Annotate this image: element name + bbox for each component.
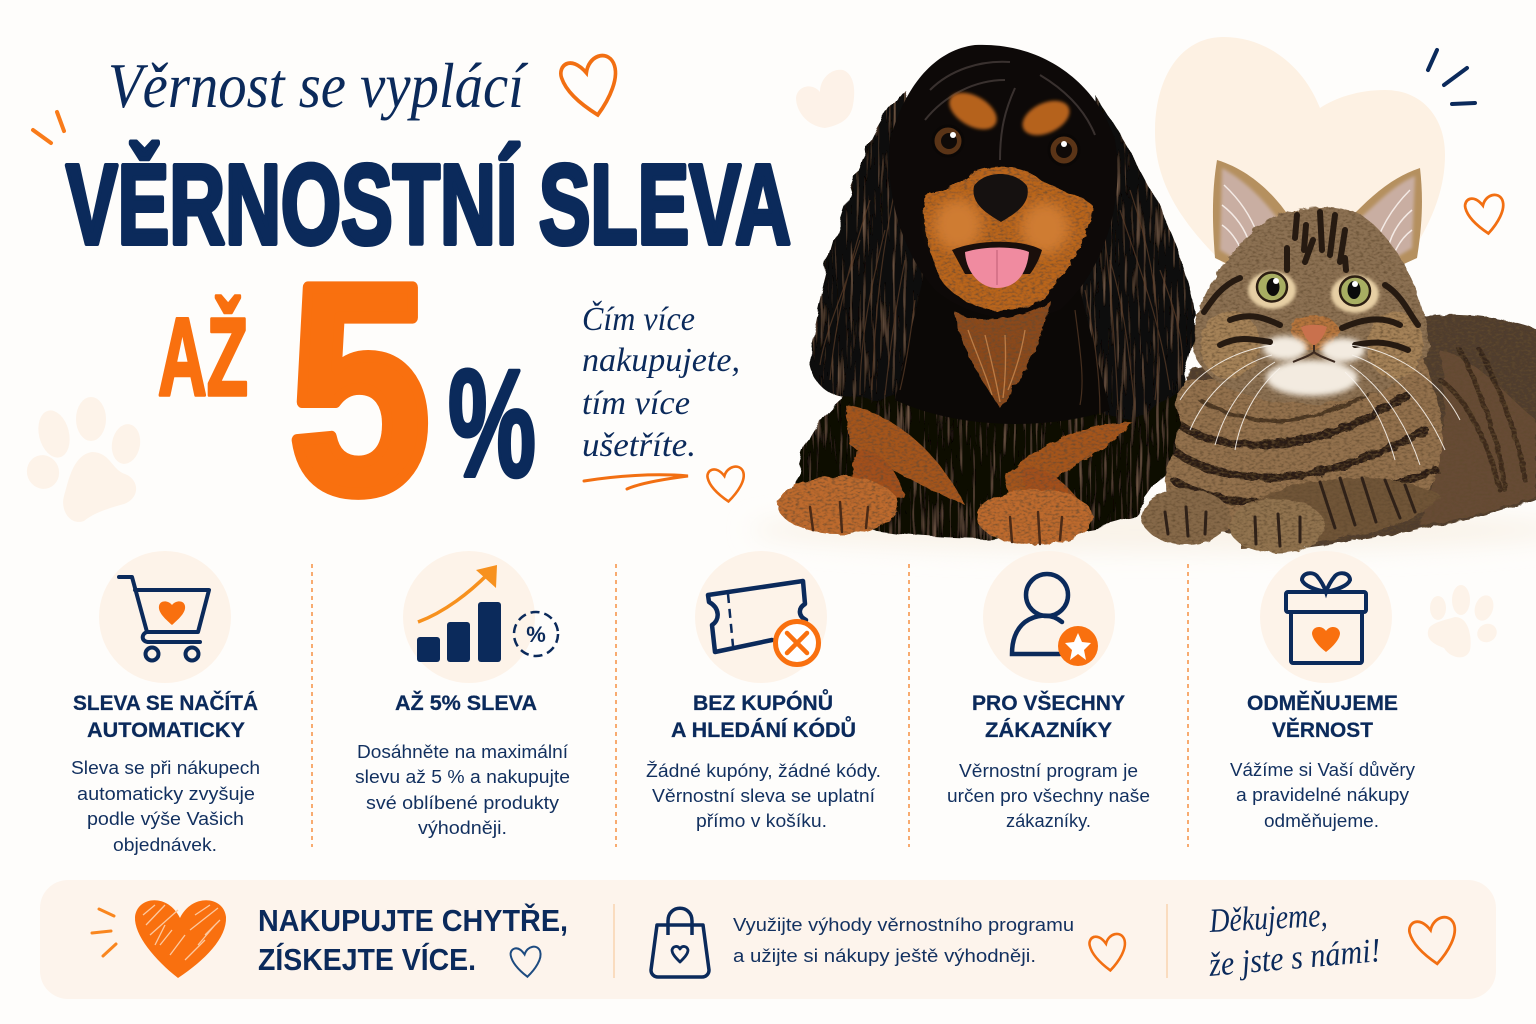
heading line 2: VĚRNOST — [1272, 718, 1373, 742]
thank you note: že jste s námi! — [1207, 932, 1382, 984]
paw print left — [22, 397, 143, 522]
hand-lettered side note — [582, 300, 740, 464]
cat nose — [1301, 325, 1327, 345]
body text — [355, 742, 570, 838]
dog eyebrows — [943, 85, 1075, 142]
dog eyes — [933, 126, 1079, 165]
banner headline: NAKUPUJTE CHYTŘE, — [258, 902, 568, 938]
dog head — [889, 45, 1118, 318]
icon: growth chart — [403, 551, 558, 683]
dog nose — [973, 174, 1028, 222]
dog neck — [895, 270, 1110, 424]
body text: slevu až 5 % a nakupujte — [355, 767, 570, 787]
body text: výhodněji. — [418, 818, 507, 838]
thank you note: Děkujeme, — [1208, 897, 1328, 940]
heading: ODMĚŇUJEME — [1247, 691, 1398, 715]
icon: shopping cart — [99, 551, 231, 683]
banner text — [733, 915, 1074, 966]
icon: growth chart: % — [526, 622, 546, 647]
heart outline — [1088, 932, 1129, 973]
dog forehead sheen — [925, 62, 1095, 160]
cat eyes — [1257, 272, 1370, 306]
divider — [613, 904, 615, 978]
heading line 2: AUTOMATICKY — [87, 719, 245, 742]
cat eye surrounds — [1248, 271, 1379, 313]
dog fringe strands — [968, 330, 1025, 402]
banner text: Využijte výhody věrnostního programu — [733, 915, 1074, 935]
feature 3: no coupons — [646, 551, 881, 831]
dog cheek highlights — [934, 199, 1069, 254]
dog mouth and tongue — [952, 242, 1042, 288]
banner headline line 2: ZÍSKEJTE VÍCE. — [258, 942, 476, 977]
scribbled orange heart — [135, 900, 226, 978]
blue heart outline — [510, 945, 544, 979]
icon: person with star — [983, 551, 1115, 683]
heart outline — [1408, 914, 1461, 968]
body text — [646, 761, 881, 831]
dog body — [796, 353, 1178, 538]
heading: PRO VŠECHNY — [972, 691, 1125, 715]
percent sign: % — [448, 338, 536, 509]
hand-lettered side note: ušetříte. — [582, 427, 696, 464]
heart outline right — [1464, 192, 1509, 237]
body text: podle výše Vašich — [87, 809, 244, 829]
main title: VĚRNOSTNÍ SLEVA — [66, 142, 791, 268]
bottom banner — [40, 880, 1496, 999]
body text: Vážíme si Vaší důvěry — [1230, 760, 1415, 780]
heading: AŽ 5% SLEVA — [395, 691, 537, 715]
orange rays — [92, 909, 116, 956]
decorative big heart behind pets — [1155, 37, 1445, 330]
cat ears — [1213, 160, 1290, 270]
feature 4: all customers — [947, 551, 1150, 831]
small heart note — [706, 464, 748, 504]
body text: určen pro všechny naše — [947, 786, 1150, 806]
cat head — [1192, 207, 1430, 404]
navy rays — [1428, 50, 1475, 104]
body text: své oblíbené produkty — [366, 793, 559, 813]
heading: SLEVA SE NAČÍTÁ — [73, 691, 258, 715]
dog ear strands — [820, 190, 1183, 415]
cat whiskers — [1180, 345, 1460, 465]
divider — [1166, 904, 1168, 978]
dog chest markings — [845, 405, 1132, 505]
hand-lettered side note: tím více — [582, 385, 690, 422]
dog chest fringe — [955, 300, 1050, 408]
heading line 2: A HLEDÁNÍ KÓDŮ — [671, 716, 856, 742]
swoosh underline — [584, 475, 688, 489]
dog paws — [778, 449, 1093, 545]
feature column dividers — [312, 564, 1188, 847]
label: AŽ: AŽ — [158, 296, 248, 419]
banner text: a užijte si nákupy ještě výhodněji. — [733, 946, 1036, 966]
hand-lettered side note: Čím více — [582, 300, 695, 338]
body text: objednávek. — [113, 835, 217, 855]
heart outline top — [558, 51, 626, 122]
body text — [947, 761, 1150, 831]
body text: odměňujeme. — [1264, 811, 1379, 831]
dog muzzle — [924, 167, 1092, 310]
paw print right — [1428, 585, 1500, 657]
body text: automaticky zvyšuje — [77, 784, 255, 804]
body text: a pravidelné nákupy — [1236, 785, 1409, 805]
thank you note — [1207, 897, 1382, 984]
heading: BEZ KUPÓNŮ — [693, 689, 833, 715]
icon: ticket with cross — [695, 551, 827, 683]
body text — [1230, 760, 1415, 831]
body text: zákazníky. — [1006, 811, 1091, 831]
dog ears — [809, 90, 1195, 420]
icon: gift box — [1260, 551, 1392, 683]
body text — [71, 758, 260, 855]
decorative small heart — [796, 70, 854, 128]
heading line 2: ZÁKAZNÍKY — [985, 719, 1112, 742]
icon: shopping bag — [651, 908, 709, 977]
body text: Dosáhněte na maximální — [357, 742, 568, 762]
hand-lettered side note: nakupujete, — [582, 342, 740, 379]
body text: přímo v košíku. — [696, 811, 827, 831]
body text: Věrnostní program je — [959, 761, 1138, 781]
big number 5: 5 — [289, 223, 430, 554]
banner background — [40, 880, 1496, 999]
feature 5: rewarding loyalty — [1230, 551, 1415, 831]
cat body — [1142, 314, 1536, 553]
cat markings — [1204, 212, 1418, 350]
feature 2: up to 5% — [355, 551, 570, 838]
body text: Věrnostní sleva se uplatní — [652, 786, 875, 806]
rug — [750, 508, 1536, 552]
hand-lettered tagline: Věrnost se vyplácí — [108, 50, 529, 121]
cat muzzle — [1263, 336, 1365, 396]
pets photo: dog and cat — [750, 45, 1536, 553]
body text: Žádné kupóny, žádné kódy. — [646, 761, 881, 781]
body text: Sleva se při nákupech — [71, 758, 260, 778]
cat ear hair — [1222, 185, 1412, 254]
orange rays — [33, 112, 64, 143]
feature 1: automatic discount — [71, 551, 260, 855]
